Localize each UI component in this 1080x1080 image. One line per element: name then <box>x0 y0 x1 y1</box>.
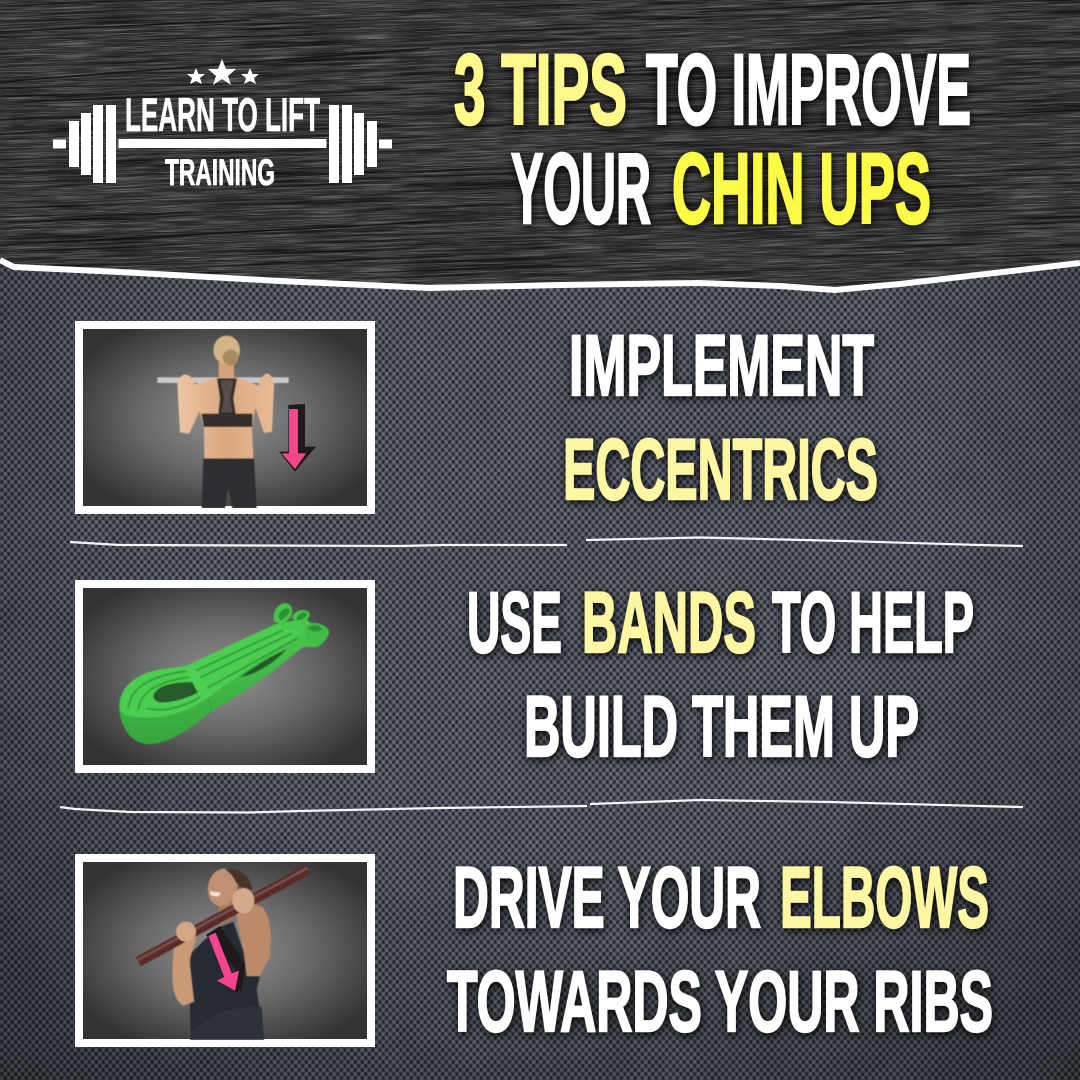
arrow: diagonal pink <box>206 926 245 992</box>
title <box>454 34 971 245</box>
band tie <box>185 666 211 700</box>
band grooves <box>128 630 298 710</box>
logo barbell <box>53 105 392 183</box>
band side wall <box>119 618 329 744</box>
illustration: green resistance band <box>119 603 329 744</box>
photo panel: woman driving elbows down <box>79 858 371 1043</box>
logo: Learn to Lift Training <box>53 59 392 193</box>
torn white edge of header <box>0 260 1080 290</box>
logo stars <box>187 59 259 85</box>
tip 2 text <box>467 575 974 775</box>
tip 1 text: IMPLEMENT <box>569 318 874 414</box>
header wood banner <box>0 0 1080 287</box>
title: 3 TIPS <box>454 34 627 146</box>
band top face <box>119 624 302 718</box>
tip 2 text: USE <box>467 575 562 671</box>
tip 3 text <box>447 850 993 1050</box>
band loops <box>274 603 292 625</box>
arrow: downward pink <box>279 404 316 472</box>
logo wordmark: LEARN TO LIFT <box>125 88 320 141</box>
divider 1 <box>70 538 1023 546</box>
tip 1 text <box>563 318 878 518</box>
tip 2 text: BANDS <box>582 575 756 671</box>
title: YOUR <box>511 133 651 245</box>
illustration: woman's back at bar <box>157 336 316 508</box>
band coil hole <box>153 682 201 702</box>
illustration: woman at angled bar <box>138 866 307 1040</box>
divider 2 <box>60 800 1023 812</box>
photo panel: resistance band <box>79 584 371 769</box>
tip 3 text: DRIVE YOUR <box>453 850 761 946</box>
photo panel: woman lowering from the bar <box>79 325 371 510</box>
logo subtitle: TRAINING <box>165 152 275 193</box>
band inner shadow <box>240 649 287 677</box>
